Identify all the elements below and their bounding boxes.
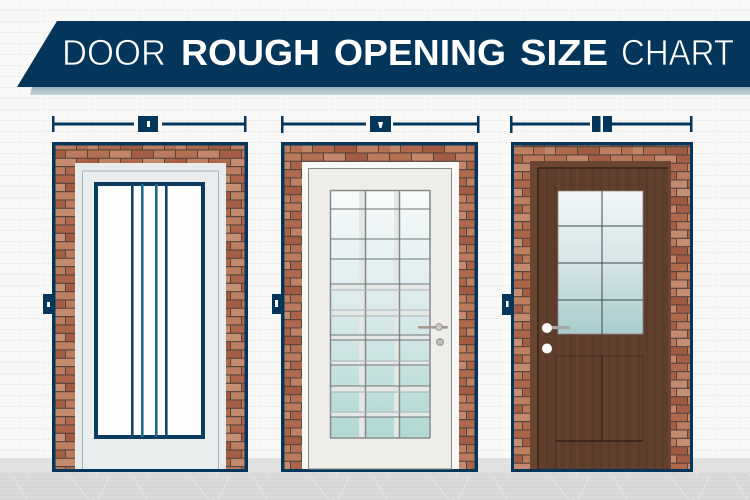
glass grid bars	[330, 209, 430, 417]
lever handle	[542, 323, 570, 333]
door slab	[308, 168, 452, 469]
title: door: DOOR	[62, 32, 166, 73]
height tab: door 1	[43, 294, 52, 314]
navy glass frame	[96, 184, 203, 437]
title: size: SIZE	[520, 32, 608, 73]
height tab: door 2	[272, 294, 281, 314]
width dimension line: door 3	[510, 116, 692, 133]
lower rail and panels	[556, 356, 643, 469]
brick surround	[284, 146, 474, 469]
wood casing	[530, 161, 671, 469]
title banner	[17, 21, 750, 87]
brick surround	[56, 146, 244, 469]
title: rough: ROUGH	[181, 32, 320, 73]
baseboard	[0, 458, 750, 472]
width dimension line: door 2	[281, 116, 480, 133]
title: chart: CHART	[621, 32, 734, 73]
door 1: frame and brick opening	[52, 142, 248, 472]
door edge lines	[82, 171, 218, 469]
casing	[302, 162, 459, 469]
width dimension line: door 1	[52, 116, 246, 132]
door edge shadow	[538, 168, 668, 469]
banner shadow	[30, 87, 750, 95]
door handle	[418, 324, 448, 330]
height tab: door 3	[502, 294, 511, 315]
brick surround	[514, 146, 690, 469]
gaps between glass columns	[359, 190, 399, 438]
thick light cross bars	[331, 284, 429, 417]
window glass	[558, 191, 643, 334]
glass edge lines	[330, 190, 430, 438]
lock cylinder	[437, 339, 443, 345]
lock knob	[542, 344, 552, 354]
door 3: frame and brick opening	[511, 142, 693, 472]
casing	[75, 163, 226, 469]
door 2: frame and brick opening	[281, 142, 478, 472]
window grid	[558, 191, 643, 334]
floor	[0, 472, 750, 500]
glass muntins	[131, 184, 168, 437]
wood door slab	[538, 168, 668, 469]
title: opening: OPENING	[334, 32, 506, 73]
glass columns	[331, 191, 429, 437]
door slab	[83, 171, 218, 469]
glass panel backing	[330, 190, 430, 438]
